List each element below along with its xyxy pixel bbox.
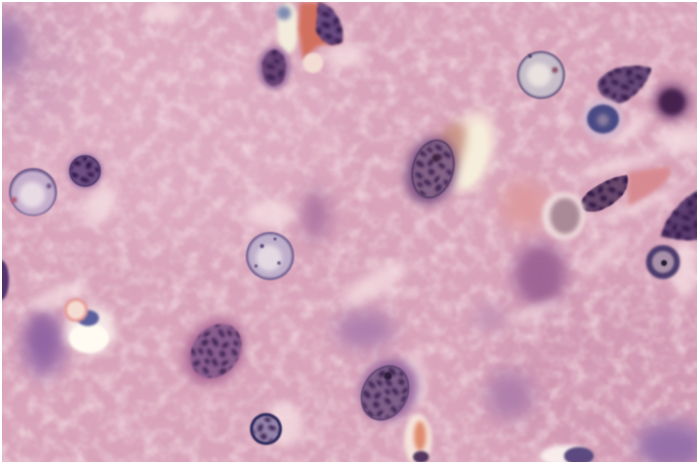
nucleus: pale round upper right [517, 51, 565, 99]
nucleus: dark round left [67, 153, 103, 189]
nucleus: dark oval upper right [598, 66, 651, 103]
nucleus: bottom oval [354, 354, 424, 427]
nucleus: blue small [582, 98, 624, 140]
nucleus: small dark bottom [250, 413, 282, 445]
nucleus: pale round centre [246, 232, 294, 280]
nucleus: right edge large [661, 190, 699, 240]
nucleus: central neuron [398, 132, 464, 210]
nucleus: lower centre oval [178, 314, 251, 390]
nucleus: pale round left [9, 168, 57, 216]
nucleus: very dark right [653, 83, 691, 121]
bottom vessel fragments and edge nuclei [0, 260, 594, 464]
capillary with elongated nucleus [542, 166, 670, 240]
white halo by central neuron [434, 107, 500, 198]
white vacuole with blue nucleus, lower left [64, 298, 115, 354]
nucleus: small ringed right [646, 245, 680, 279]
vessel top: white lumen, red cell and nuclei [257, 2, 343, 90]
